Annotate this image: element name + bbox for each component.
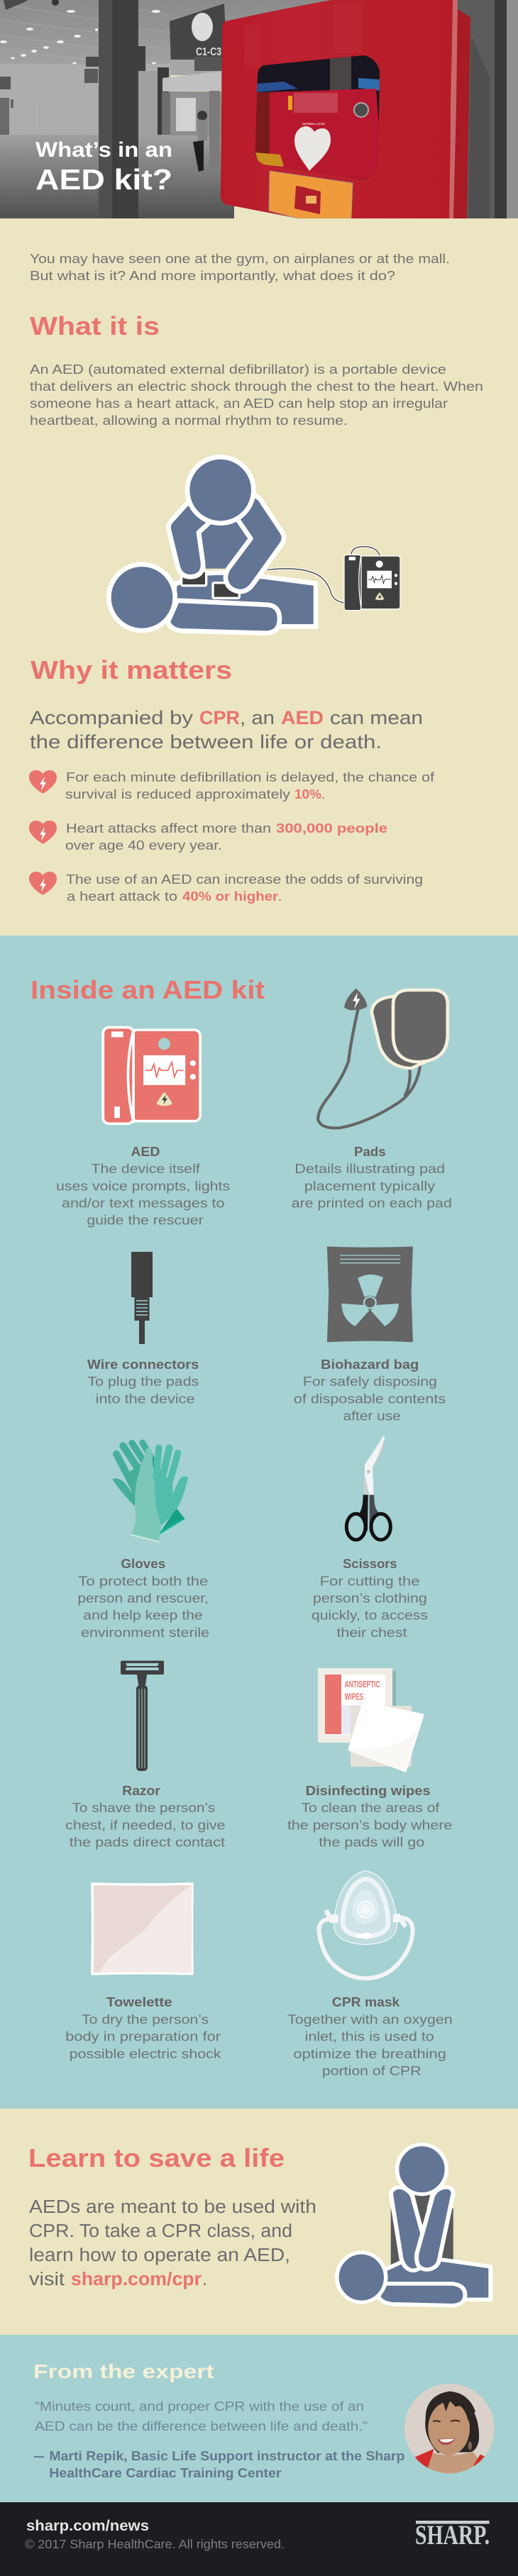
icon: scissors	[346, 1436, 390, 1540]
AED text: and/or text messages to	[62, 1197, 224, 1211]
paragraph: CPR class: AEDs are meant to be used with	[29, 2197, 316, 2217]
Pads text: Details illustrating pad	[294, 1162, 445, 1176]
intro text	[30, 251, 450, 283]
icon: razor	[121, 1661, 164, 1771]
victim torso	[380, 2260, 490, 2299]
rescuer torso	[201, 521, 250, 569]
Scissors text: quickly, to access	[312, 1609, 428, 1623]
Scissors text: person’s clothing	[313, 1592, 427, 1606]
stat 2: Heart attacks affect more than	[66, 821, 271, 835]
CPR mask text: Together with an oxygen	[287, 2013, 453, 2027]
attribution	[34, 2448, 404, 2480]
Gloves text: Gloves	[121, 1557, 165, 1571]
logo: Sharp: SHARP.	[415, 2520, 490, 2550]
icon: pads	[318, 989, 448, 1128]
Disinfecting wipes text: the pads will go	[319, 1836, 424, 1850]
Disinfecting wipes text: the person’s body where	[287, 1819, 452, 1833]
stat 2: over age 40 every year.	[65, 838, 222, 853]
rescuer arm left	[391, 2187, 426, 2270]
Razor text: Razor	[122, 1784, 160, 1798]
stat 1: 10%	[294, 787, 321, 801]
background wall right	[454, 0, 518, 218]
Pads text	[292, 1145, 452, 1211]
rescuer left arm	[168, 503, 218, 577]
icon: heart with bolt	[29, 872, 57, 895]
AED wire	[268, 547, 380, 603]
Pads text: are printed on each pad	[292, 1197, 452, 1211]
icon: CPR mask	[319, 1871, 413, 1978]
Disinfecting wipes text: To clean the areas of	[302, 1801, 440, 1815]
AED text: guide the rescuer	[87, 1214, 204, 1228]
quote	[35, 2399, 368, 2433]
Scissors text: their chest	[336, 1626, 407, 1640]
stat 3: 40% or higher	[182, 889, 278, 904]
Scissors text	[312, 1557, 428, 1640]
quote: “Minutes count, and proper CPR with the use of an	[35, 2399, 364, 2414]
lead statement: CPR	[199, 707, 240, 728]
Scissors text: Scissors	[343, 1557, 397, 1571]
white heart	[294, 126, 331, 171]
copyright: © 2017 Sharp HealthCare. All rights reserved.	[25, 2537, 285, 2551]
lead statement: Accompanied by	[30, 707, 194, 728]
icon: disinfecting wipes	[318, 1668, 423, 1771]
hero photo with title: C1-C3	[196, 46, 221, 58]
Biohazard bag text: For safely disposing	[303, 1375, 437, 1389]
CPR mask text: inlet, this is used to	[305, 2030, 434, 2044]
paragraph: what it is	[30, 362, 483, 428]
Biohazard bag text	[294, 1358, 446, 1423]
paragraph: CPR class: .	[202, 2270, 207, 2289]
AED text: The device itself	[91, 1162, 201, 1176]
rescuer arm right	[417, 2187, 453, 2270]
quote: AED can be the difference between life and death.”	[35, 2419, 368, 2433]
rescuer head	[187, 457, 253, 523]
lead statement: can mean	[330, 707, 423, 728]
Wire connectors text	[87, 1358, 199, 1406]
rescuer head	[397, 2145, 446, 2194]
Towelette text: To dry the person’s	[82, 2013, 209, 2027]
paragraph: what it is: that delivers an electric shock through the chest to the heart. When	[30, 379, 483, 394]
stat 1: For each minute defibrillation is delayed, the chance of	[66, 770, 435, 784]
Biohazard bag text: after use	[343, 1409, 401, 1423]
attribution: HealthCare Cardiac Training Center	[49, 2465, 281, 2480]
paragraph: CPR class: CPR. To take a CPR class, and	[29, 2221, 292, 2241]
panel: learn to save a life	[0, 2109, 518, 2335]
paragraph: what it is: An AED (automated external defibrillator) is a portable device	[30, 362, 446, 377]
Disinfecting wipes text: Disinfecting wipes	[306, 1784, 431, 1798]
hero title: What’s in an	[35, 138, 172, 162]
page background: cream	[0, 0, 518, 936]
attribution: Marti Repik, Basic Life Support instructor at the Sharp	[49, 2448, 404, 2463]
icon: heart with bolt	[29, 821, 57, 844]
lead statement: AED	[281, 707, 324, 728]
torso behind arms	[391, 2209, 453, 2265]
heading: From the expert: From the expert	[33, 2360, 214, 2382]
paragraph: what it is: heartbeat, allowing a normal rhythm to resume.	[30, 413, 348, 428]
paragraph: CPR class: sharp.com/cpr	[71, 2270, 202, 2289]
Biohazard bag text: of disposable contents	[294, 1392, 446, 1406]
intro text: But what is it? And more importantly, what does it do?	[30, 268, 395, 283]
Razor text: To shave the person’s	[72, 1801, 215, 1815]
Razor text: chest, if needed, to give	[65, 1819, 226, 1833]
lead statement: , an	[240, 707, 275, 728]
Razor text	[65, 1784, 226, 1850]
icon: towelette	[92, 1884, 192, 1974]
heading: Why it matters: Why it matters	[31, 655, 232, 684]
small AED device	[344, 555, 400, 611]
lead statement: the difference between life or death.	[30, 731, 382, 753]
icon: heart with bolt	[29, 770, 57, 794]
stat 3: The use of an AED can increase the odds of surviving	[66, 872, 423, 887]
stat 2	[29, 821, 387, 853]
CPR mask text: CPR mask	[332, 1995, 400, 2009]
orange plate	[269, 171, 353, 218]
red cabinet	[221, 0, 470, 218]
Gloves text	[77, 1557, 209, 1640]
victim arm	[168, 601, 280, 633]
rescuer right arm	[226, 495, 284, 592]
Disinfecting wipes text	[287, 1784, 452, 1850]
Wire connectors text: To plug the pads	[87, 1375, 199, 1389]
AED text: uses voice prompts, lights	[56, 1179, 230, 1193]
heading: What it is: What it is	[30, 311, 160, 340]
Towelette text: body in preparation for	[65, 2030, 221, 2044]
Gloves text: person and rescuer,	[77, 1592, 209, 1606]
stat 1	[29, 770, 435, 801]
AED text	[56, 1145, 230, 1228]
Towelette text	[65, 1995, 222, 2061]
Towelette text: Towelette	[106, 1995, 172, 2009]
stat 1: .	[321, 787, 325, 801]
Towelette text: possible electric shock	[70, 2047, 222, 2061]
illustration: CPR with AED	[109, 457, 400, 633]
CPR mask text: portion of CPR	[322, 2064, 421, 2078]
window with device inside	[255, 55, 380, 179]
heading: Learn to save a life: Learn to save a life	[28, 2143, 285, 2172]
icon: gloves	[113, 1443, 188, 1542]
hero title: AED kit?	[35, 163, 172, 196]
paragraph: what it is: someone has a heart attack, an AED can help stop an irregular	[30, 396, 448, 411]
column	[99, 0, 138, 218]
paragraph: CPR class: visit	[29, 2270, 65, 2289]
stat 1: survival is reduced approximately	[65, 787, 291, 801]
footer	[0, 2502, 518, 2576]
Wire connectors text: Wire connectors	[87, 1358, 199, 1372]
stat 3: a heart attack to	[67, 889, 177, 904]
stat 3	[29, 872, 423, 904]
victim head	[337, 2253, 386, 2302]
stat 2: 300,000 people	[276, 821, 387, 835]
icon: biohazard bag	[327, 1247, 413, 1342]
hero title	[35, 142, 171, 190]
icon: wire connector	[131, 1252, 153, 1344]
victim arm	[378, 2284, 465, 2306]
heading: Inside an AED kit: Inside an AED kit	[31, 975, 265, 1004]
photo: expert portrait	[404, 2383, 495, 2474]
Pads text: placement typically	[304, 1179, 435, 1193]
panel: from the expert	[0, 2335, 518, 2502]
hero photo with title	[0, 0, 518, 218]
Gloves text: To protect both the	[78, 1575, 208, 1589]
attribution: —	[34, 2448, 44, 2463]
footer url: sharp.com/news	[26, 2518, 149, 2534]
illustration: CPR compressions	[337, 2145, 490, 2306]
chest pads	[182, 571, 239, 598]
intro text: You may have seen one at the gym, on airplanes or at the mall.	[30, 251, 450, 266]
paragraph: CPR class: learn how to operate an AED,	[29, 2245, 290, 2265]
CPR mask text: optimize the breathing	[293, 2047, 446, 2061]
AED text: AED	[131, 1145, 160, 1159]
icon: disinfecting wipes: ANTISEPTIC	[345, 1679, 380, 1689]
Scissors text: For cutting the	[320, 1575, 420, 1589]
Gloves text: environment sterile	[81, 1626, 209, 1640]
victim torso	[170, 572, 316, 626]
paragraph: CPR class	[29, 2197, 316, 2289]
woman silhouette	[193, 111, 207, 172]
Gloves text: and help keep the	[83, 1609, 203, 1623]
Biohazard bag text: Biohazard bag	[321, 1358, 419, 1372]
Wire connectors text: into the device	[95, 1392, 195, 1406]
Razor text: the pads direct contact	[70, 1836, 225, 1850]
red cabinet: DEFIBRILLATOR	[302, 122, 325, 126]
lead statement	[30, 707, 423, 753]
victim head	[109, 565, 175, 631]
panel: inside an AED kit	[0, 936, 518, 2109]
Pads text: Pads	[354, 1145, 386, 1159]
icon: disinfecting wipes: WIPES	[345, 1691, 363, 1701]
icon: AED	[103, 1028, 200, 1123]
stat 3: .	[278, 889, 282, 904]
CPR mask text	[287, 1995, 453, 2078]
